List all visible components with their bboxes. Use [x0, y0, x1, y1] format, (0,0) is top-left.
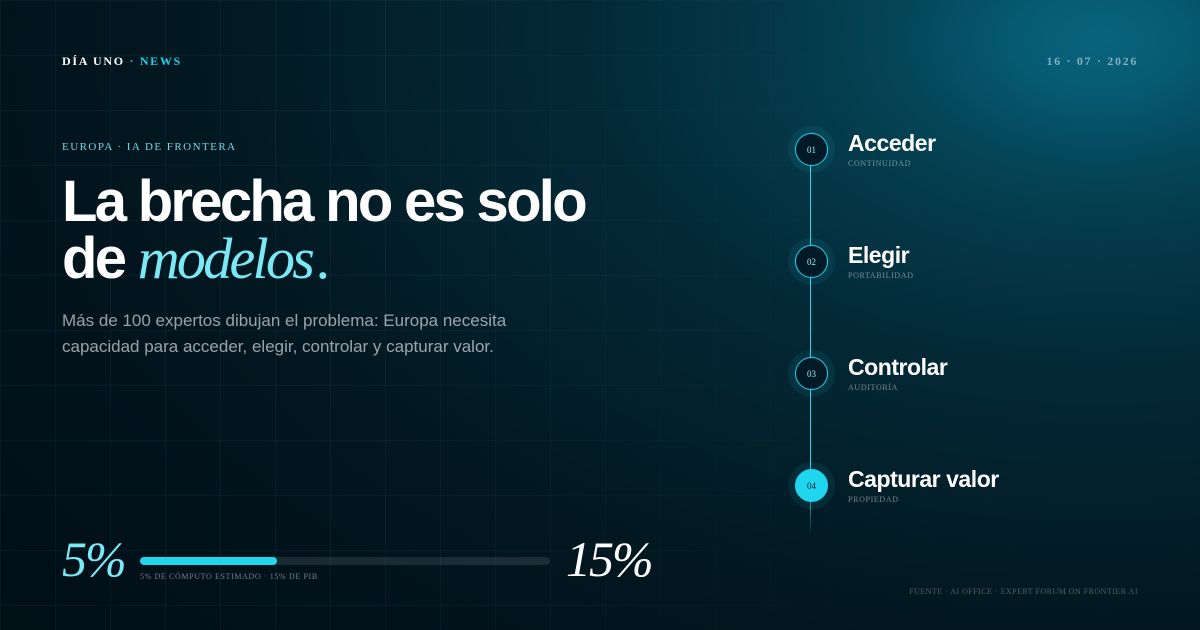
step 03 label: AUDITORÍA [848, 383, 898, 392]
step 01 label: CONTINUIDAD [848, 159, 911, 168]
date: 16 · 07 · 2026 [1046, 54, 1138, 68]
step 03 marker: 03 [807, 369, 816, 379]
source: FUENTE · AI OFFICE · EXPERT FORUM ON FRONTIER AI [909, 587, 1138, 596]
title [62, 169, 586, 291]
step 02 marker [795, 245, 828, 278]
step 01 title: Acceder [848, 130, 936, 156]
progress bar [140, 557, 550, 565]
title: de modelos. [62, 226, 329, 291]
step 04 marker [795, 469, 828, 502]
brand: DÍA UNO · NEWS [62, 54, 182, 68]
progress bar fill [140, 557, 277, 565]
step 02 label: PORTABILIDAD [848, 271, 914, 280]
step 01 marker: 01 [807, 145, 816, 155]
stat: 5%: 5% [62, 531, 125, 587]
step 03 title: Controlar [848, 354, 947, 380]
step 01 marker [795, 133, 828, 166]
step 04 marker: 04 [807, 481, 816, 491]
step 02 marker: 02 [807, 257, 816, 267]
step 02 title: Elegir [848, 242, 909, 268]
step 04 label: PROPIEDAD [848, 495, 899, 504]
bar caption: 5% DE CÓMPUTO ESTIMADO · 15% DE PIB [140, 572, 318, 581]
timeline line [810, 150, 811, 535]
subtitle: Más de 100 expertos dibujan el problema: Europa necesita [62, 311, 506, 330]
stat: 15%: 15% [566, 531, 652, 587]
step 03 marker [795, 357, 828, 390]
subtitle [62, 311, 506, 356]
step 04 title: Capturar valor [848, 466, 999, 492]
eyebrow: EUROPA · IA DE FRONTERA [62, 141, 237, 153]
title: La brecha no es solo [62, 169, 585, 234]
subtitle: capacidad para acceder, elegir, controlar y capturar valor. [62, 337, 494, 356]
